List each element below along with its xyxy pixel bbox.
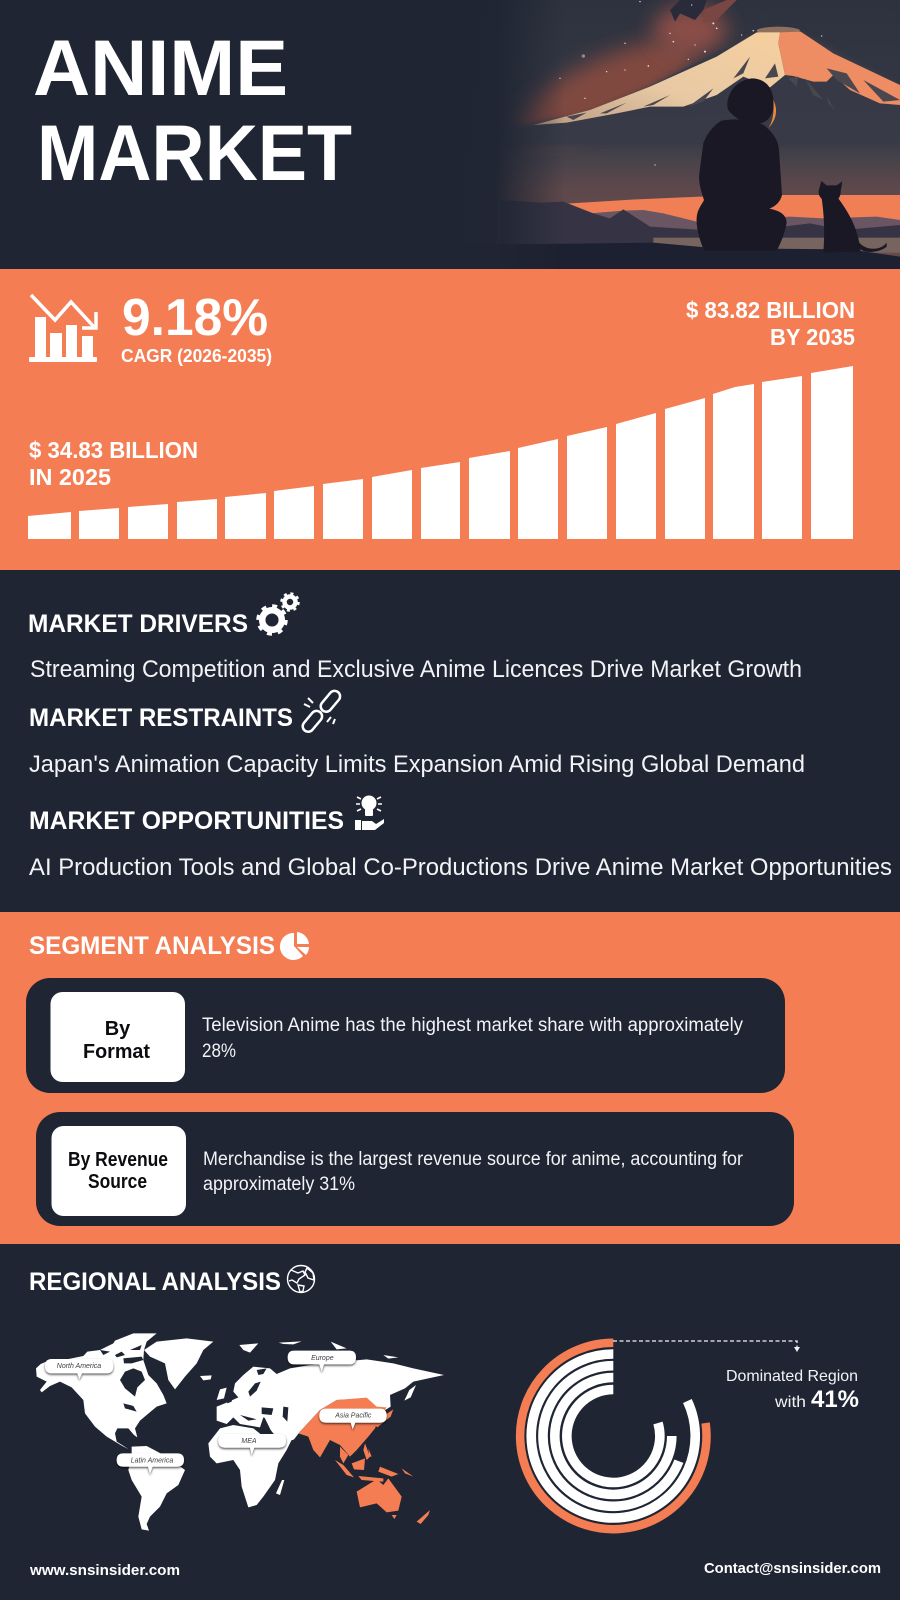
label: Europe: Europe (311, 1355, 334, 1362)
footer: website: www.snsinsider.com (29, 1562, 180, 1579)
card: by format (26, 978, 785, 1093)
2025 value callout: $ 34.83 BILLION (29, 437, 198, 463)
greenland (144, 1338, 213, 1389)
callout: dominated region: Dominated Region (726, 1368, 858, 1385)
dashed leader arrow (613, 1341, 800, 1352)
panel: segment analysis (0, 912, 900, 1244)
horizon (560, 195, 900, 227)
radial chart: regional share (520, 1343, 707, 1529)
label: North America: North America (57, 1363, 101, 1370)
label: MEA (218, 1434, 286, 1455)
south america (128, 1446, 185, 1531)
text: revenue finding (203, 1149, 744, 1195)
2025 value callout: IN 2025 (29, 464, 111, 490)
callout: dominated region: 41% (811, 1386, 859, 1413)
heading: market opportunities: MARKET OPPORTUNITIES (29, 807, 344, 835)
eurasia (217, 1359, 444, 1437)
label: by revenue source: By Revenue (68, 1149, 168, 1171)
text: format finding: Television Anime has the highest market share with approximately (202, 1015, 743, 1036)
callout: dominated region: with (774, 1394, 806, 1411)
panel: regional analysis (29, 1266, 859, 1531)
label: Asia Pacific (319, 1409, 387, 1429)
north america (36, 1333, 167, 1449)
CAGR value: 9.18% (122, 289, 268, 347)
panel: header (33, 0, 900, 270)
title (33, 23, 352, 197)
label: by format: By (105, 1018, 131, 1040)
2035 value callout: $ 83.82 BILLION (686, 297, 855, 323)
label: Europe (288, 1351, 356, 1372)
heading: segment analysis: SEGMENT ANALYSIS (29, 932, 275, 960)
card: by revenue source (36, 1112, 794, 1226)
asia pacific highlighted (298, 1398, 430, 1524)
illustration: mountain, person and cat at dusk (450, 0, 900, 270)
mountain body (503, 32, 900, 147)
label: North America (45, 1359, 113, 1379)
heading: market restraints: MARKET RESTRAINTS (29, 704, 293, 732)
panel: market dynamics (28, 594, 892, 881)
icon: broken chain link (300, 689, 342, 734)
person (697, 78, 787, 251)
text: market opportunities: AI Production Tools and Global Co-Productions Drive Anime Market Opportunities (29, 854, 892, 881)
callout: dominated region (726, 1368, 859, 1413)
text: revenue finding: approximately 31% (203, 1174, 355, 1195)
label: MEA: MEA (241, 1438, 257, 1445)
label: by revenue source (52, 1126, 186, 1216)
icon: gears (258, 594, 298, 634)
title: ANIME (33, 23, 288, 112)
text: market restraints: Japan's Animation Capacity Limits Expansion Amid Rising Global Demand (29, 751, 805, 778)
label: by revenue source: Source (88, 1171, 147, 1193)
icon: pie chart (280, 932, 309, 960)
label: by format (50, 992, 185, 1082)
label: by format: Format (83, 1041, 150, 1063)
text: revenue finding: Merchandise is the largest revenue source for anime, accounting for (203, 1149, 744, 1170)
text: market drivers: Streaming Competition and Exclusive Anime Licences Drive Market Growth (30, 656, 802, 683)
2035 value callout (686, 297, 855, 350)
panel: market growth (0, 269, 900, 570)
label: Latin America: Latin America (131, 1458, 173, 1465)
heading: market drivers: MARKET DRIVERS (28, 610, 248, 638)
label: Latin America (117, 1453, 184, 1474)
text: format finding: 28% (202, 1041, 236, 1062)
icon: chart with trend arrow (29, 295, 97, 362)
title: MARKET (37, 108, 352, 197)
2025 value callout (29, 437, 198, 490)
seas and lakes (100, 1345, 288, 1422)
cat (819, 181, 887, 252)
CAGR label: CAGR (2026-2035) (121, 346, 272, 366)
africa (208, 1425, 294, 1507)
text: format finding (202, 1015, 743, 1062)
icon: globe (288, 1266, 314, 1292)
icon: lightbulb on hand (355, 796, 384, 830)
label: Asia Pacific: Asia Pacific (334, 1413, 372, 1420)
world map (36, 1333, 444, 1531)
heading: regional analysis: REGIONAL ANALYSIS (29, 1268, 281, 1296)
bar chart: market growth (28, 366, 853, 539)
footer: contact: Contact@snsinsider.com (704, 1560, 881, 1577)
2035 value callout: BY 2035 (770, 324, 855, 350)
